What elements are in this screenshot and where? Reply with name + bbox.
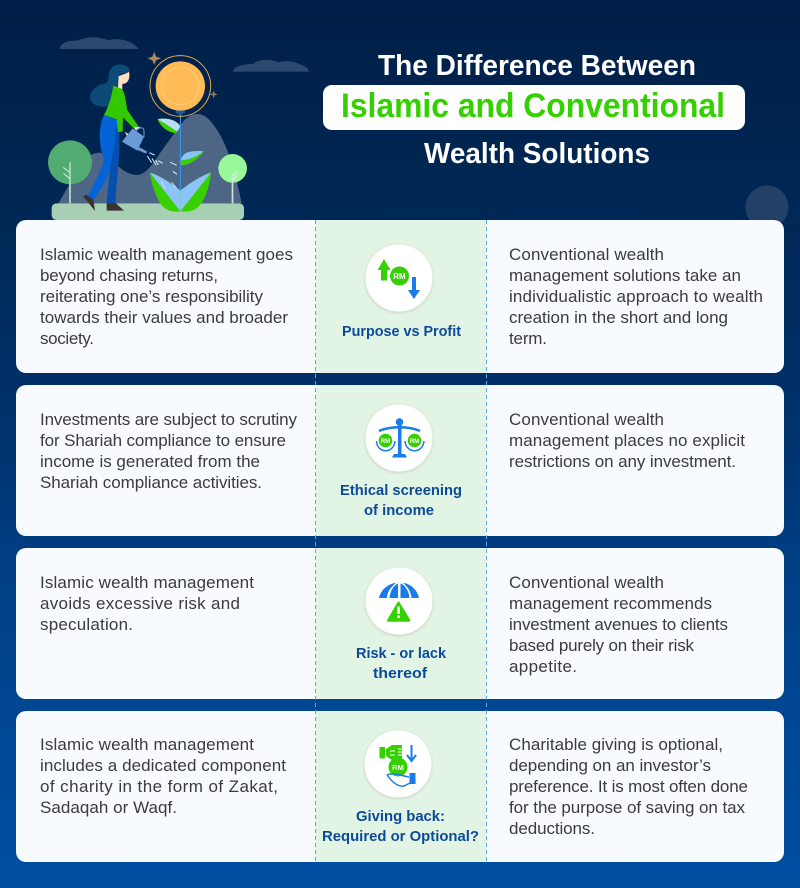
shoes	[83, 195, 124, 211]
shirt	[104, 86, 138, 132]
row 2 right text: management places no explicit	[509, 431, 745, 450]
sun flower	[150, 56, 211, 116]
row 3 right text: appetite.	[509, 657, 577, 676]
row 3 right text	[509, 573, 728, 676]
row 4 left text: Sadaqah or Waqf.	[40, 798, 177, 817]
row 1 icon: arrows and RM coin: RM	[393, 272, 406, 281]
row 4 left text: Islamic wealth management	[40, 735, 254, 754]
card row 4	[16, 711, 784, 862]
hair	[90, 64, 130, 107]
woman	[83, 64, 147, 211]
title	[323, 50, 745, 170]
row 2 left text: Investments are subject to scrutiny	[40, 410, 298, 429]
mountains	[58, 114, 242, 203]
row 3 left text: Islamic wealth management	[40, 573, 254, 592]
row 4 left text: of charity in the form of Zakat,	[40, 777, 278, 796]
card row 2	[16, 385, 784, 536]
row 2 label	[340, 482, 462, 519]
cloud right	[233, 60, 309, 72]
upper leaf	[158, 119, 180, 133]
row 2 left text	[40, 410, 298, 492]
row 4 icon: giving hands and money bag: RM	[392, 763, 404, 772]
tree right	[218, 154, 247, 203]
title line 2: Islamic and Conventional	[341, 87, 725, 125]
row 4 right text: for the purpose of saving on tax	[509, 798, 746, 817]
row 1 left text: reiterating one’s responsibility	[40, 287, 264, 306]
row 2 label: of income	[364, 502, 434, 519]
row 3 right text: management recommends	[509, 594, 712, 613]
row 1 right text: individualistic approach to wealth	[509, 287, 763, 306]
row 3 label: thereof	[373, 665, 428, 682]
cloud left	[60, 37, 138, 49]
row 1 left text: towards their values and broader	[40, 308, 288, 327]
title line 3: Wealth Solutions	[424, 138, 650, 170]
highlight pill	[323, 85, 745, 130]
water drops	[147, 153, 177, 174]
hands	[125, 127, 140, 139]
row 1 left text: society.	[40, 329, 94, 348]
row 3 right text: Conventional wealth	[509, 573, 664, 592]
row 3 left text	[40, 573, 254, 634]
row 3 icon: umbrella and warning	[366, 568, 432, 634]
jeans	[87, 115, 119, 203]
row 2 label: Ethical screening	[340, 482, 462, 499]
row 2 left text: Shariah compliance activities.	[40, 473, 262, 492]
card row 1	[16, 220, 784, 373]
star large	[148, 52, 161, 65]
row 3 right text: based purely on their risk	[509, 636, 694, 655]
row 4 label	[322, 808, 479, 845]
row 3 right text: investment avenues to clients	[509, 615, 728, 634]
row 4 right text: depending on an investor’s	[509, 756, 711, 775]
row 1 right text: management solutions take an	[509, 266, 741, 285]
face	[118, 72, 129, 89]
row 1 right text: Conventional wealth	[509, 245, 664, 264]
decorative circle	[746, 186, 788, 228]
title line 1: The Difference Between	[378, 50, 696, 82]
row 1 right text	[509, 245, 763, 348]
big leaves	[150, 173, 211, 212]
row 3 label	[356, 645, 447, 682]
row 1 right text: term.	[509, 329, 547, 348]
row 4 right text	[509, 735, 748, 838]
row 1 left text: beyond chasing returns,	[40, 266, 218, 285]
ground	[52, 203, 244, 220]
row 2 right text: restrictions on any investment.	[509, 452, 736, 471]
row 2 right text	[509, 410, 745, 471]
row 2 icon: scales: RM	[410, 439, 419, 445]
row 3 left text: speculation.	[40, 615, 133, 634]
row 2 icon: scales	[366, 404, 432, 472]
row 1 left text	[40, 245, 293, 348]
middle leaf	[181, 151, 204, 165]
row 2 right text: Conventional wealth	[509, 410, 664, 429]
row 4 left text: includes a dedicated component	[40, 756, 286, 775]
row 2 left text: income is generated from the	[40, 452, 260, 471]
row 4 left text	[40, 735, 286, 817]
row 4 label: Required or Optional?	[322, 828, 479, 845]
row 4 right text: Charitable giving is optional,	[509, 735, 723, 754]
row 2 left text: for Shariah compliance to ensure	[40, 431, 286, 450]
row 4 icon: giving hands and money bag	[364, 730, 432, 798]
row 1 label: Purpose vs Profit	[342, 323, 461, 340]
tree left	[48, 140, 92, 203]
plant stem	[180, 112, 181, 211]
illustration: woman watering plant	[48, 37, 309, 220]
center column green bands	[316, 220, 486, 862]
card row 3	[16, 548, 784, 699]
row 1 icon: arrows and RM coin	[366, 244, 432, 312]
row 1 left text: Islamic wealth management goes	[40, 245, 293, 264]
row 3 left text: avoids excessive risk and	[40, 594, 240, 613]
row 4 label: Giving back:	[356, 808, 445, 825]
watering can	[122, 128, 147, 154]
star small	[209, 90, 218, 99]
row 4 right text: deductions.	[509, 819, 595, 838]
row 3 label: Risk - or lack	[356, 645, 447, 662]
row 2 icon: scales: RM	[381, 439, 390, 445]
row 4 right text: preference. It is most often done	[509, 777, 748, 796]
row 1 right text: creation in the short and long	[509, 308, 728, 327]
